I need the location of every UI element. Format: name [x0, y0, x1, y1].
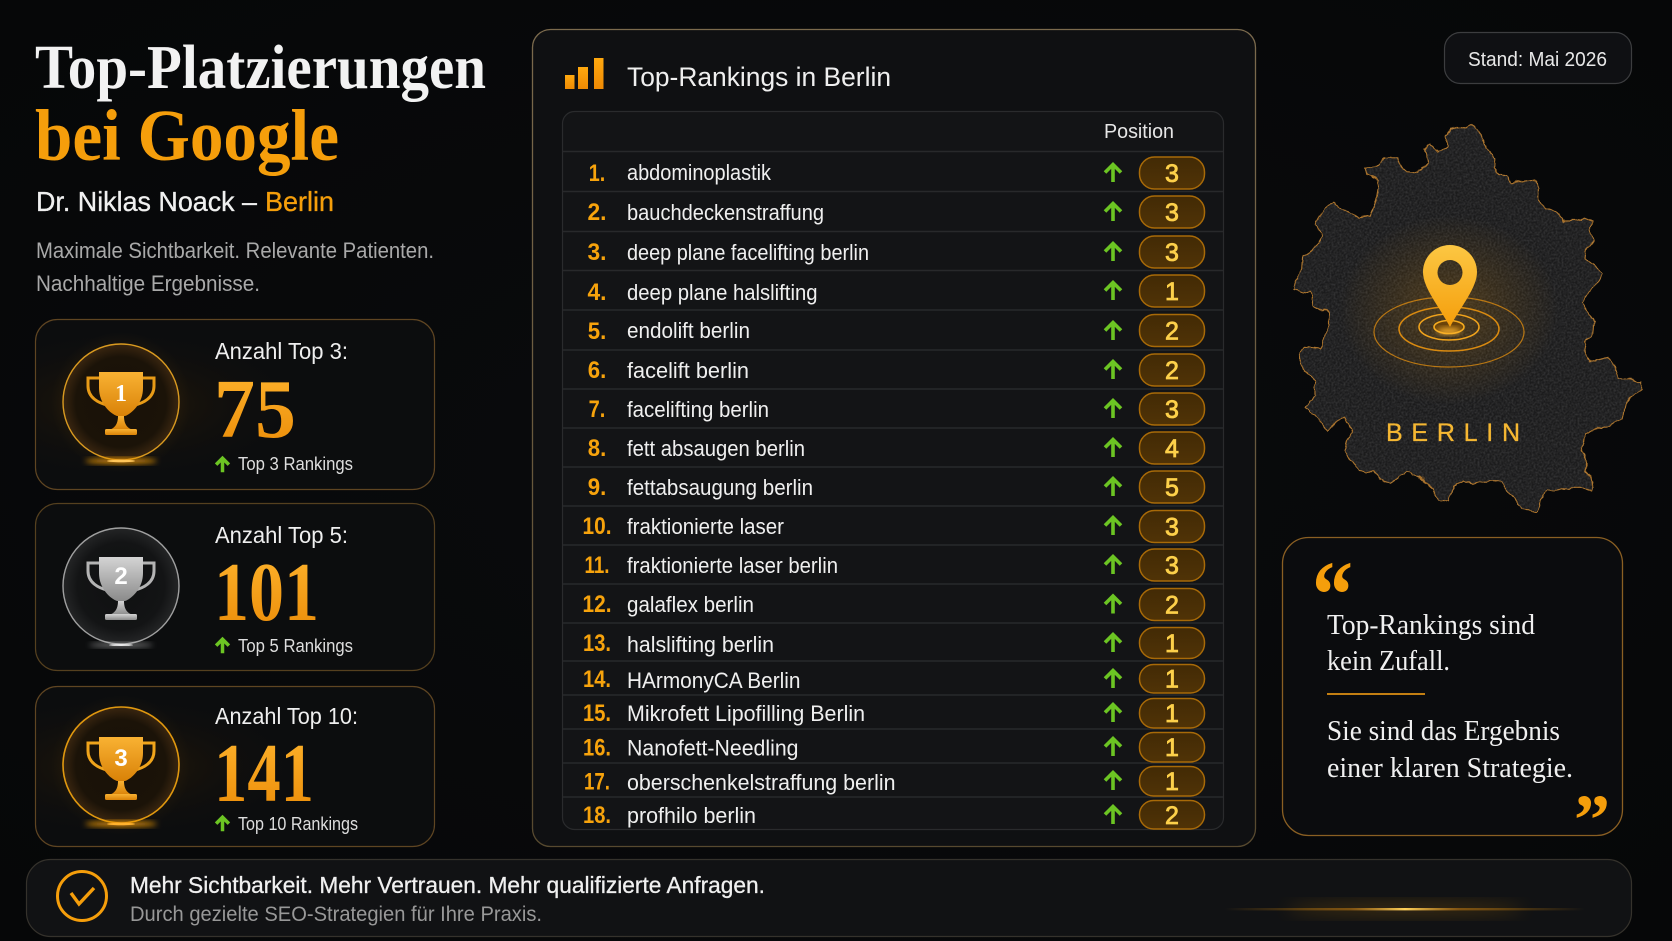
row 14: HArmonyCA Berlin	[627, 668, 800, 693]
description: Nachhaltige Ergebnisse.	[36, 271, 260, 296]
row 10: 3	[1165, 514, 1179, 542]
row 13: 13.	[583, 630, 611, 657]
heading	[35, 34, 486, 176]
row 14: 14.	[583, 666, 611, 693]
row 8: fett absaugen berlin	[627, 436, 805, 461]
row 15: 15.	[583, 700, 611, 727]
row 18	[583, 800, 1204, 830]
icon: gold trophy 3	[51, 695, 191, 835]
row 15	[583, 698, 1204, 728]
map glow	[1339, 215, 1559, 405]
footer banner	[26, 860, 1632, 936]
table header: Position	[1104, 120, 1174, 143]
icon: gold trophy 1	[51, 332, 191, 472]
row 2: bauchdeckenstraffung	[627, 200, 824, 225]
panel: Anzahl Top 3: 75	[214, 363, 296, 456]
row 13: halslifting berlin	[627, 632, 774, 657]
row 8: 4	[1165, 435, 1179, 463]
row 12: 2	[1165, 592, 1179, 620]
row 9: fettabsaugung berlin	[627, 475, 813, 500]
panel: Anzahl Top 5	[36, 504, 434, 670]
subtitle: Berlin	[265, 186, 334, 217]
row 8	[588, 432, 1204, 464]
row 6: 2	[1165, 357, 1179, 385]
row 13	[583, 628, 1204, 658]
row 12: galaflex berlin	[627, 592, 754, 617]
row 16: 1	[1165, 734, 1179, 762]
row 14	[583, 664, 1204, 694]
footer text: Mehr Sichtbarkeit. Mehr Vertrauen. Mehr qualifizierte Anfragen.	[130, 872, 765, 898]
row 5	[588, 314, 1204, 346]
description	[36, 238, 434, 296]
target rings	[1374, 297, 1524, 367]
icon: check circle	[58, 872, 106, 920]
row 10: fraktionierte laser	[627, 514, 784, 539]
icon: silver trophy 2: 2	[114, 563, 128, 590]
row 10: 10.	[582, 513, 612, 540]
panel: Anzahl Top 10: Top 10 Rankings	[238, 814, 358, 834]
row 6: 6.	[588, 357, 606, 384]
quote text: Top-Rankings sind	[1327, 610, 1535, 641]
description: Maximale Sichtbarkeit. Relevante Patienten.	[36, 238, 434, 263]
row 17: 17.	[584, 768, 610, 796]
row 5: endolift berlin	[627, 318, 750, 343]
row 16: Nanofett-Needling	[627, 736, 798, 760]
row 18: 2	[1165, 802, 1179, 830]
row 18: 18.	[583, 802, 611, 829]
row 11: 11.	[584, 552, 610, 579]
row 2: 3	[1165, 199, 1179, 227]
row 11	[584, 549, 1204, 581]
panel: Anzahl Top 10: 141	[214, 727, 314, 820]
heading: bei Google	[35, 95, 339, 176]
row 7: 7.	[589, 396, 605, 423]
row 5: 5.	[588, 318, 606, 345]
Berlin map	[1293, 124, 1641, 512]
row 13: 1	[1165, 630, 1179, 658]
quote text: einer klaren Strategie.	[1327, 753, 1573, 784]
row 16	[583, 732, 1204, 762]
panel: Anzahl Top 3: Anzahl Top 3:	[215, 338, 348, 364]
rankings table	[562, 112, 1224, 830]
icon: location pin	[1423, 245, 1477, 327]
row 11: fraktionierte laser berlin	[627, 553, 838, 578]
row 2	[588, 196, 1204, 228]
panel heading: Top-Rankings in Berlin	[627, 62, 891, 92]
footer text	[130, 872, 765, 926]
closing quote mark: ”	[1574, 780, 1610, 860]
panel: quote	[1282, 538, 1622, 860]
date badge: Stand: Mai 2026	[1468, 49, 1607, 71]
panel: Anzahl Top 5: Anzahl Top 5:	[215, 522, 348, 548]
map label: BERLIN	[1386, 419, 1520, 447]
row 4	[588, 275, 1204, 307]
quote text: kein Zufall.	[1327, 646, 1450, 677]
quote text: Sie sind das Ergebnis	[1327, 716, 1560, 747]
row 12	[582, 588, 1204, 620]
icon: gold trophy 1: 1	[115, 381, 127, 407]
panel: Anzahl Top 10	[36, 686, 434, 846]
row 11: 3	[1165, 552, 1179, 580]
row 9: 9.	[588, 474, 606, 501]
panel: Anzahl Top 5: Top 5 Rankings	[238, 636, 353, 656]
subtitle: Dr. Niklas Noack –	[36, 186, 258, 217]
opening quote mark: “	[1312, 541, 1353, 648]
row 17: oberschenkelstraffung berlin	[627, 770, 896, 795]
row 1	[589, 157, 1204, 189]
row 1: 1.	[589, 160, 605, 187]
footer glow line	[1225, 903, 1585, 915]
row 10	[582, 510, 1204, 542]
panel: Anzahl Top 10: Anzahl Top 10:	[215, 703, 358, 729]
row 8: 8.	[588, 435, 606, 462]
row 3: 3	[1165, 239, 1179, 267]
row 3	[588, 236, 1204, 268]
row 9: 5	[1165, 474, 1179, 502]
row 1: 3	[1165, 160, 1179, 188]
panel: Anzahl Top 3: Top 3 Rankings	[238, 454, 353, 474]
row 7: 3	[1165, 396, 1179, 424]
row 18: profhilo berlin	[627, 803, 756, 828]
row 2: 2.	[588, 199, 606, 226]
panel: Anzahl Top 3	[36, 320, 434, 490]
row 7: facelifting berlin	[627, 397, 769, 422]
icon: bar chart	[565, 58, 604, 89]
row 6: facelift berlin	[627, 358, 749, 383]
row 7	[589, 393, 1204, 425]
icon: silver trophy 2	[63, 528, 179, 647]
row 6	[588, 354, 1204, 386]
row 15: Mikrofett Lipofilling Berlin	[627, 701, 865, 726]
row 3: 3.	[588, 239, 606, 266]
quote text	[1327, 610, 1573, 784]
row 4: 4.	[588, 279, 606, 306]
row 14: 1	[1165, 666, 1179, 694]
footer text: Durch gezielte SEO-Strategien für Ihre Praxis.	[130, 903, 542, 926]
row 5: 2	[1165, 318, 1179, 346]
row 1: abdominoplastik	[627, 160, 772, 185]
row 9	[588, 471, 1204, 503]
panel: Anzahl Top 5: 101	[214, 546, 319, 639]
date badge	[1444, 32, 1632, 84]
row 17: 1	[1165, 768, 1179, 796]
panel: Top-Rankings in Berlin	[532, 30, 1256, 846]
row 3: deep plane facelifting berlin	[627, 240, 869, 265]
row 4: deep plane halslifting	[627, 280, 818, 305]
row 16: 16.	[583, 734, 611, 762]
row 12: 12.	[582, 591, 612, 618]
row 17	[584, 766, 1204, 796]
icon: gold trophy 3: 3	[114, 745, 128, 772]
heading: Top-Platzierungen	[35, 34, 486, 102]
row 4: 1	[1165, 278, 1179, 306]
row 15: 1	[1165, 700, 1179, 728]
